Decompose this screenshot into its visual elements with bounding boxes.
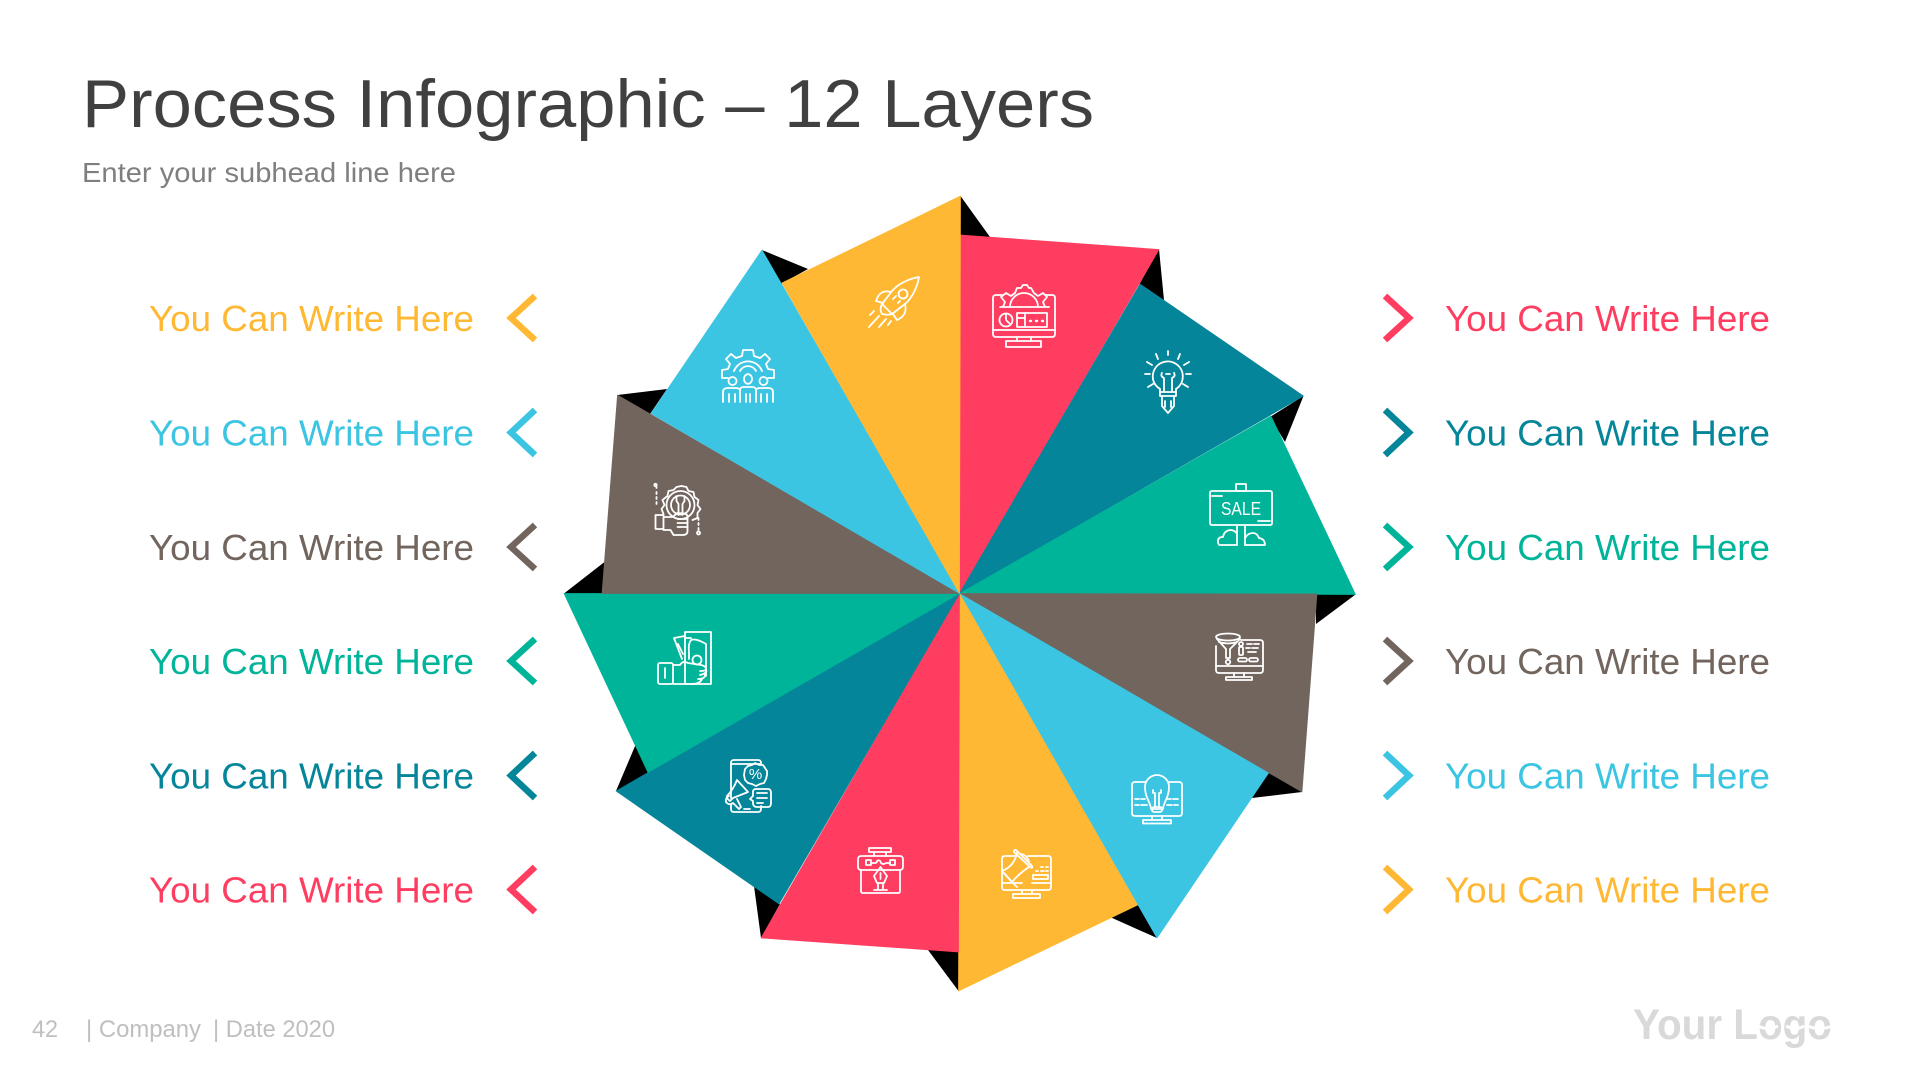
icon: light bulb with pencil bbox=[1145, 351, 1191, 413]
icon: hand holding cash bbox=[658, 632, 711, 684]
icon: gear with wrench and hand bbox=[654, 484, 700, 535]
wedge: red bottom bbox=[761, 594, 960, 952]
footer bbox=[32, 1016, 335, 1043]
wedge: teal upper right bbox=[960, 284, 1304, 594]
left label 6: You Can Write Here bbox=[149, 870, 474, 910]
wedge: green right bbox=[960, 416, 1356, 594]
icon: gear with people bbox=[722, 350, 774, 402]
right list of labels bbox=[1385, 296, 1770, 912]
icon: sale sign: SALE bbox=[1221, 499, 1261, 519]
icon: monitor with light bulb bbox=[1132, 775, 1182, 824]
wedge: yellow top bbox=[782, 196, 960, 594]
black fold triangles bbox=[564, 196, 1356, 991]
icon: monitor with gear bbox=[993, 285, 1055, 347]
left label 1: You Can Write Here bbox=[149, 298, 474, 339]
wedge: yellow bottom bbox=[958, 594, 1138, 991]
subtitle: Enter your subhead line here bbox=[82, 157, 456, 188]
right label 5: You Can Write Here bbox=[1445, 756, 1770, 796]
icon: toolbox with pen nib bbox=[858, 848, 903, 893]
right label 3: You Can Write Here bbox=[1445, 527, 1770, 568]
left label 4: You Can Write Here bbox=[149, 641, 474, 682]
date: | Date 2020 bbox=[213, 1016, 335, 1043]
page number: 42 bbox=[32, 1016, 58, 1043]
icon: monitor with funnel bbox=[1216, 634, 1263, 680]
icon: phone with discount and megaphone: % bbox=[749, 766, 762, 783]
wedge: blue lower right bbox=[960, 594, 1268, 938]
wedge: red top bbox=[960, 235, 1159, 594]
right label 4: You Can Write Here bbox=[1445, 641, 1770, 682]
right label 2: You Can Write Here bbox=[1445, 412, 1770, 454]
icon: phone with discount and megaphone bbox=[726, 760, 771, 812]
left label 3: You Can Write Here bbox=[149, 527, 474, 568]
wedge: green left bbox=[564, 594, 960, 772]
logo: Your Logo bbox=[1633, 1001, 1832, 1049]
pinwheel chart bbox=[564, 196, 1356, 991]
wedge: blue upper left bbox=[651, 250, 960, 594]
left list of labels bbox=[149, 296, 535, 912]
icon: sale sign bbox=[1210, 484, 1272, 545]
title: Process Infographic – 12 Layers bbox=[82, 66, 1094, 142]
company: | Company bbox=[86, 1016, 201, 1043]
wedge: brown left bbox=[602, 395, 960, 594]
right label 6: You Can Write Here bbox=[1445, 870, 1770, 910]
right label 1: You Can Write Here bbox=[1445, 298, 1770, 339]
wedge: brown right bbox=[960, 594, 1317, 792]
left label 2: You Can Write Here bbox=[149, 412, 474, 454]
icon: rocket bbox=[869, 277, 919, 327]
left label 5: You Can Write Here bbox=[149, 756, 474, 796]
icon: monitor with megaphone bbox=[1002, 850, 1051, 898]
wedge: teal lower left bbox=[616, 594, 960, 904]
